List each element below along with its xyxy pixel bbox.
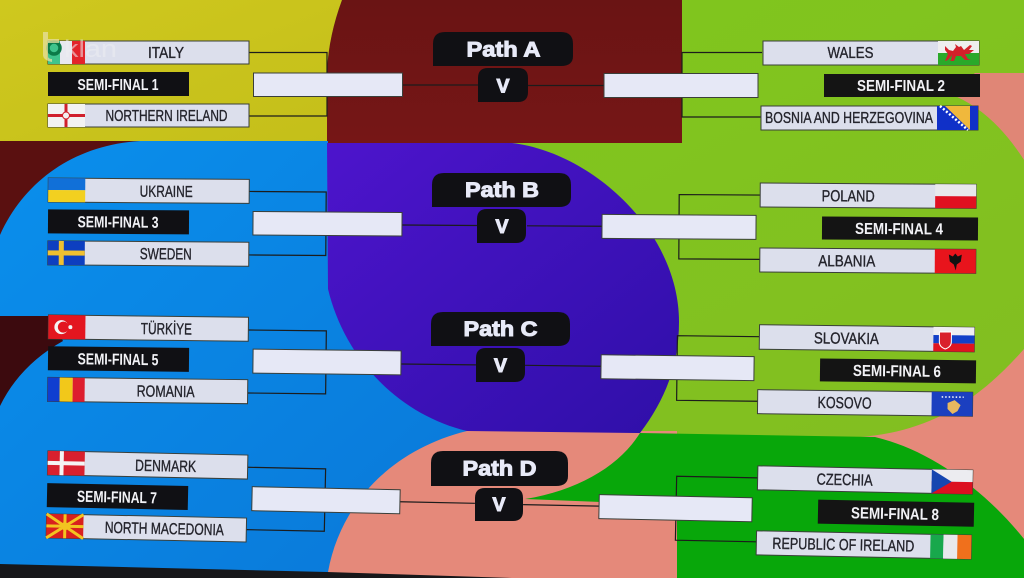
winner slot: [252, 487, 400, 514]
Türkiye row: TÜRKİYE: [141, 319, 192, 339]
semi-final 1 label: SEMI-FINAL 1: [78, 77, 159, 94]
winner slot: [601, 355, 754, 381]
semi-final 4 label: SEMI-FINAL 4: [855, 221, 943, 238]
panel: path B left bracket: [48, 178, 477, 268]
watermark logo: klan: [64, 36, 117, 63]
Slovakia row: SLOVAKIA: [814, 330, 879, 348]
Poland row: [760, 183, 976, 208]
panel: path C right bracket: [524, 322, 977, 416]
semi-final 6 label: [820, 358, 976, 383]
Sweden row: SWEDEN: [140, 246, 192, 264]
semi-final 5 label: SEMI-FINAL 5: [77, 351, 159, 369]
winner slot: [602, 214, 756, 239]
Czechia row: [757, 466, 973, 494]
panel: path D header: [431, 451, 568, 521]
panel: path C header: [431, 312, 570, 382]
winner slot: [254, 73, 402, 96]
panel: path D right bracket: [522, 461, 975, 559]
Ukraine row: UKRAINE: [140, 184, 193, 201]
background: centre salmon area: [327, 431, 677, 578]
winner slot: [604, 74, 758, 98]
panel: path B header: Path B: [465, 179, 539, 202]
Republic of Ireland row: [756, 531, 972, 559]
Bosnia and Herzegovina row: [761, 106, 978, 130]
panel: path C left bracket: [48, 315, 476, 406]
Czechia row: CZECHIA: [816, 472, 873, 490]
North Macedonia row: [46, 514, 247, 542]
semi-final 2 label: SEMI-FINAL 2: [857, 78, 945, 95]
panel: path A header: Path A: [466, 38, 540, 62]
panel: path A left bracket: [48, 41, 478, 127]
Türkiye row: [48, 315, 248, 341]
background: top-right salmon corner: [950, 73, 1024, 160]
background: yellow area: [0, 0, 342, 141]
Romania row: ROMANIA: [137, 383, 195, 401]
panel: path A right bracket: [528, 41, 980, 130]
Albania row: ALBANIA: [818, 253, 876, 271]
winner slot: [599, 495, 752, 522]
background: maroon corner: [0, 141, 150, 241]
panel: path B header: [432, 173, 571, 243]
Ukraine row: [48, 178, 249, 203]
semi-final 3 label: SEMI-FINAL 3: [77, 214, 159, 232]
semi-final 4 label: [822, 217, 978, 240]
Sweden row: [48, 241, 249, 266]
panel: path C header: Path C: [464, 318, 538, 341]
Kosovo row: KOSOVO: [817, 395, 872, 413]
Denmark row: DENMARK: [135, 458, 197, 476]
Italy row: ITALY: [148, 45, 184, 62]
semi-final 1 label: [48, 72, 189, 96]
Albania row: [760, 248, 976, 273]
semi-final 7 label: SEMI-FINAL 7: [77, 489, 157, 507]
Poland row: POLAND: [822, 188, 875, 206]
semi-final 8 label: SEMI-FINAL 8: [851, 505, 939, 524]
winner slot: [253, 211, 402, 236]
Kosovo row: [757, 390, 973, 416]
Italy row: [48, 41, 249, 64]
Romania row: [48, 377, 248, 404]
background: dark green area: [525, 433, 1024, 578]
Republic of Ireland row: REPUBLIC OF IRELAND: [772, 536, 914, 555]
winner slot: [253, 349, 401, 375]
semi-final 3 label: [48, 209, 189, 234]
panel: path B header: V: [496, 217, 509, 238]
background: lower maroon wedge: [0, 316, 63, 406]
background: blue area: [0, 141, 467, 578]
watermark logo: [43, 32, 117, 63]
background: dark red centre: [327, 0, 682, 143]
panel: path A header: V: [496, 76, 510, 98]
Northern Ireland row: [48, 104, 249, 127]
panel: path D header: Path D: [462, 458, 536, 480]
semi-final 5 label: [48, 346, 189, 372]
panel: path D left bracket: [46, 451, 476, 547]
panel: path C header: V: [494, 356, 507, 377]
Slovakia row: [759, 325, 975, 352]
panel: path D header: V: [492, 495, 506, 516]
Bosnia and Herzegovina row: BOSNIA AND HERZEGOVINA: [765, 110, 933, 127]
North Macedonia row: NORTH MACEDONIA: [105, 520, 224, 539]
panel: path B right bracket: [527, 182, 978, 273]
background: purple circle: [327, 143, 679, 433]
semi-final 7 label: [47, 483, 188, 510]
Northern Ireland row: NORTHERN IRELAND: [106, 108, 228, 125]
Denmark row: [47, 451, 248, 479]
background: right salmon area: [860, 349, 1024, 545]
semi-final 8 label: [818, 500, 974, 527]
screen bezel: [0, 564, 512, 578]
semi-final 6 label: SEMI-FINAL 6: [853, 363, 941, 381]
Wales row: [763, 41, 979, 65]
panel: path A header: [433, 32, 573, 102]
Wales row: WALES: [828, 45, 874, 62]
semi-final 2 label: [824, 74, 980, 97]
